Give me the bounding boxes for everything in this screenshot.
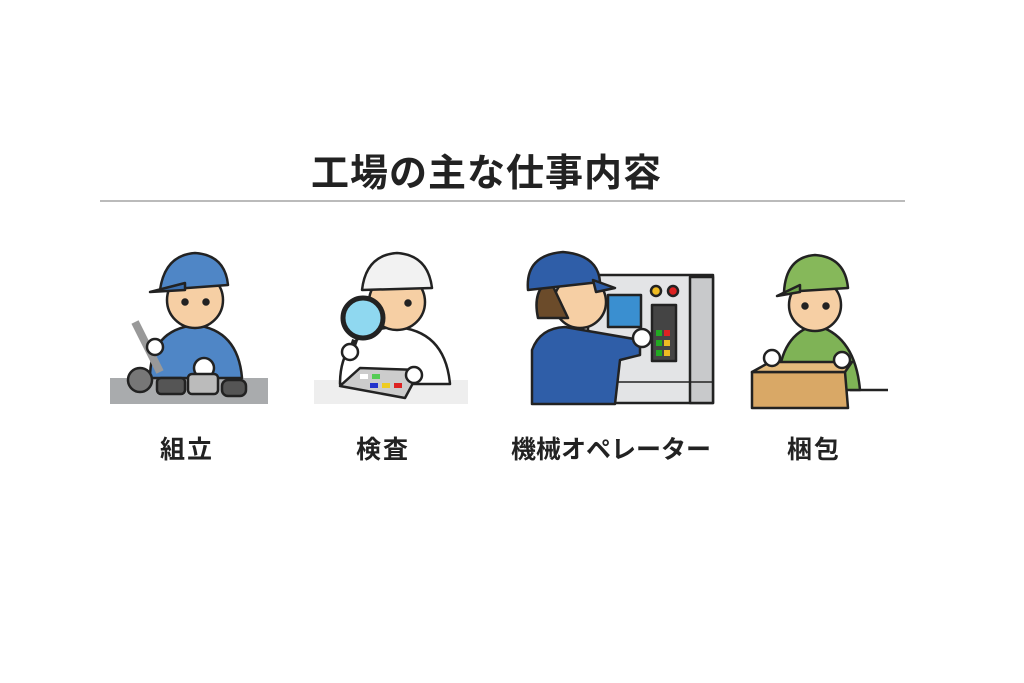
title: 工場の主な仕事内容 <box>311 153 662 195</box>
icon: assembly worker <box>110 253 268 404</box>
label: machine operator: 機械オペレーター <box>511 436 711 464</box>
label: assembly: 組立 <box>160 436 214 464</box>
label: packing: 梱包 <box>787 436 841 464</box>
icon: machine operator <box>528 252 713 404</box>
icon: inspection worker <box>314 253 468 404</box>
icon: packing worker <box>752 255 888 408</box>
label: inspection: 検査 <box>356 436 410 464</box>
